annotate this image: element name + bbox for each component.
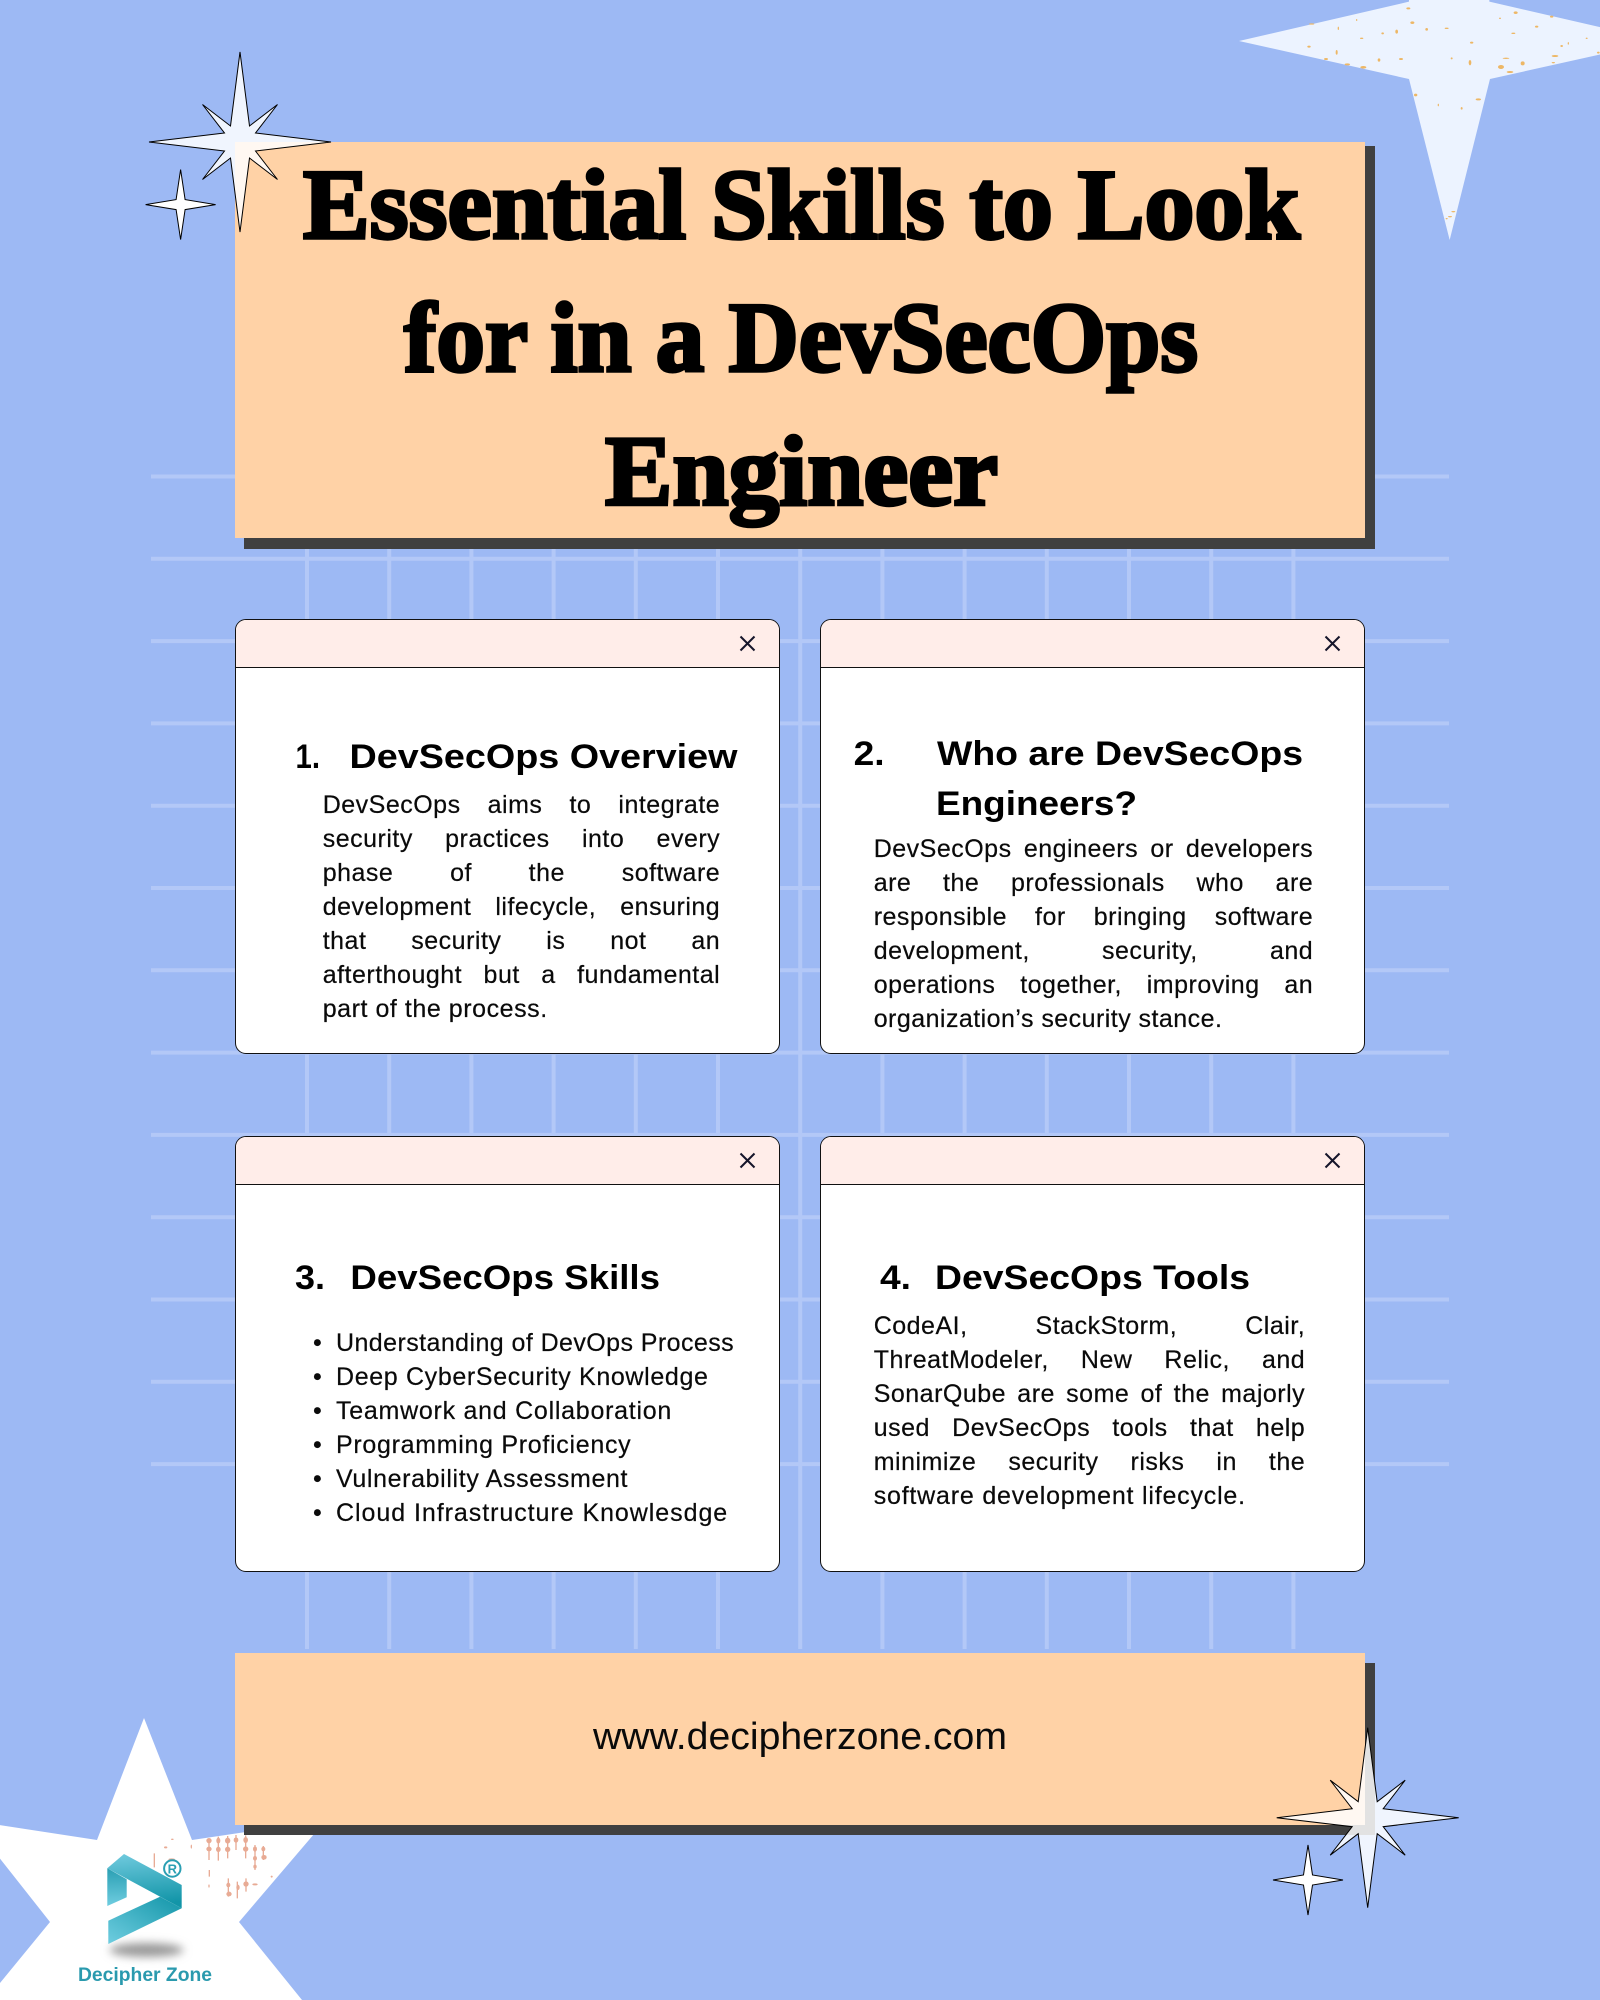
title xyxy=(302,149,1302,528)
logo: Decipher Zone xyxy=(78,1854,212,1986)
footer shadow xyxy=(244,1663,1375,1835)
title panel xyxy=(235,142,1365,538)
panel: DevSecOps Skills xyxy=(235,1136,780,1572)
body text: development lifecycle, ensuring xyxy=(323,892,720,920)
skills list: Programming Proficiency xyxy=(336,1430,631,1458)
body text: SonarQube are some of the majorly xyxy=(874,1380,1305,1408)
body text: operations together, improving an xyxy=(874,970,1313,998)
body text: part of the process. xyxy=(323,994,548,1022)
panel: DevSecOps Skills: • xyxy=(313,1430,322,1458)
heading: Engineers? xyxy=(936,785,1137,823)
skills list: Vulnerability Assessment xyxy=(336,1464,628,1492)
body text: used DevSecOps tools that help xyxy=(874,1414,1305,1442)
registered mark: R xyxy=(168,1861,178,1876)
body text: that security is not an xyxy=(323,926,720,954)
heading: 3. xyxy=(295,1259,325,1297)
logo mark xyxy=(107,1854,182,1944)
star: top right speckled xyxy=(1239,0,1600,240)
panel: DevSecOps Skills: • xyxy=(313,1362,322,1390)
skills list: Teamwork and Collaboration xyxy=(336,1396,672,1424)
window bar xyxy=(821,620,1364,668)
body text: ThreatModeler, New Relic, and xyxy=(874,1346,1305,1374)
heading: 2. xyxy=(854,735,885,773)
heading: 1. xyxy=(296,738,320,776)
body text: are the professionals who are xyxy=(874,868,1313,896)
footer url: www.decipherzone.com xyxy=(592,1716,1007,1758)
body text: CodeAI, StackStorm, Clair, xyxy=(874,1312,1305,1340)
panel: DevSecOps Overview xyxy=(235,619,780,1054)
body text: DevSecOps aims to integrate xyxy=(323,790,720,818)
star: bottom left with logo xyxy=(0,1718,313,2000)
body text: development, security, and xyxy=(874,936,1313,964)
body text xyxy=(874,1312,1305,1510)
body text: software development lifecycle. xyxy=(874,1482,1246,1510)
body text: afterthought but a fundamental xyxy=(323,960,720,988)
panel: DevSecOps Skills: • xyxy=(313,1498,323,1526)
icon: close xyxy=(740,636,756,652)
heading: DevSecOps Skills xyxy=(350,1259,660,1297)
body text: phase of the software xyxy=(323,858,720,886)
logo shadow xyxy=(110,1943,184,1957)
panel: DevSecOps Skills: • xyxy=(313,1464,322,1492)
body text: minimize security risks in the xyxy=(874,1448,1305,1476)
heading: 4. xyxy=(880,1259,911,1297)
skills list: Understanding of DevOps Process xyxy=(336,1328,734,1356)
title: Essential Skills to Look xyxy=(303,149,1300,260)
skills list: Deep CyberSecurity Knowledge xyxy=(336,1362,709,1390)
body text: organization’s security stance. xyxy=(874,1004,1222,1032)
panel: Who are DevSecOps Engineers xyxy=(820,619,1365,1054)
icon: close xyxy=(1324,636,1340,652)
sparkles: top left xyxy=(146,52,332,240)
sparkle large xyxy=(149,52,331,232)
icon: close xyxy=(740,1152,756,1168)
panel: DevSecOps Tools xyxy=(820,1136,1365,1572)
body text: DevSecOps engineers or developers xyxy=(874,834,1313,862)
sparkles: bottom right xyxy=(1272,1728,1459,1916)
title: Engineer xyxy=(605,416,998,526)
body text xyxy=(874,834,1313,1032)
window bar xyxy=(236,620,779,668)
skills list xyxy=(313,1328,734,1526)
sparkle small xyxy=(1273,1845,1343,1915)
sparkle small xyxy=(146,170,216,240)
logo wordmark: Decipher Zone xyxy=(78,1965,212,1986)
window bar xyxy=(821,1137,1364,1185)
body text: responsible for bringing software xyxy=(874,902,1313,930)
heading: Who are DevSecOps xyxy=(937,735,1303,773)
title shadow xyxy=(244,146,1375,549)
sparkle large xyxy=(1277,1728,1459,1908)
title: for in a DevSecOps xyxy=(404,282,1198,393)
heading: DevSecOps Overview xyxy=(350,738,738,776)
body text xyxy=(323,790,720,1022)
heading: DevSecOps Tools xyxy=(935,1259,1250,1297)
skills list: Cloud Infrastructure Knowlesdge xyxy=(336,1498,728,1526)
heading xyxy=(854,735,1303,823)
body text: security practices into every xyxy=(323,824,720,852)
panel: DevSecOps Skills: • xyxy=(313,1396,322,1424)
panel: DevSecOps Skills: • xyxy=(313,1328,322,1356)
footer panel xyxy=(235,1653,1365,1825)
window bar xyxy=(236,1137,779,1185)
icon: close xyxy=(1324,1152,1340,1168)
